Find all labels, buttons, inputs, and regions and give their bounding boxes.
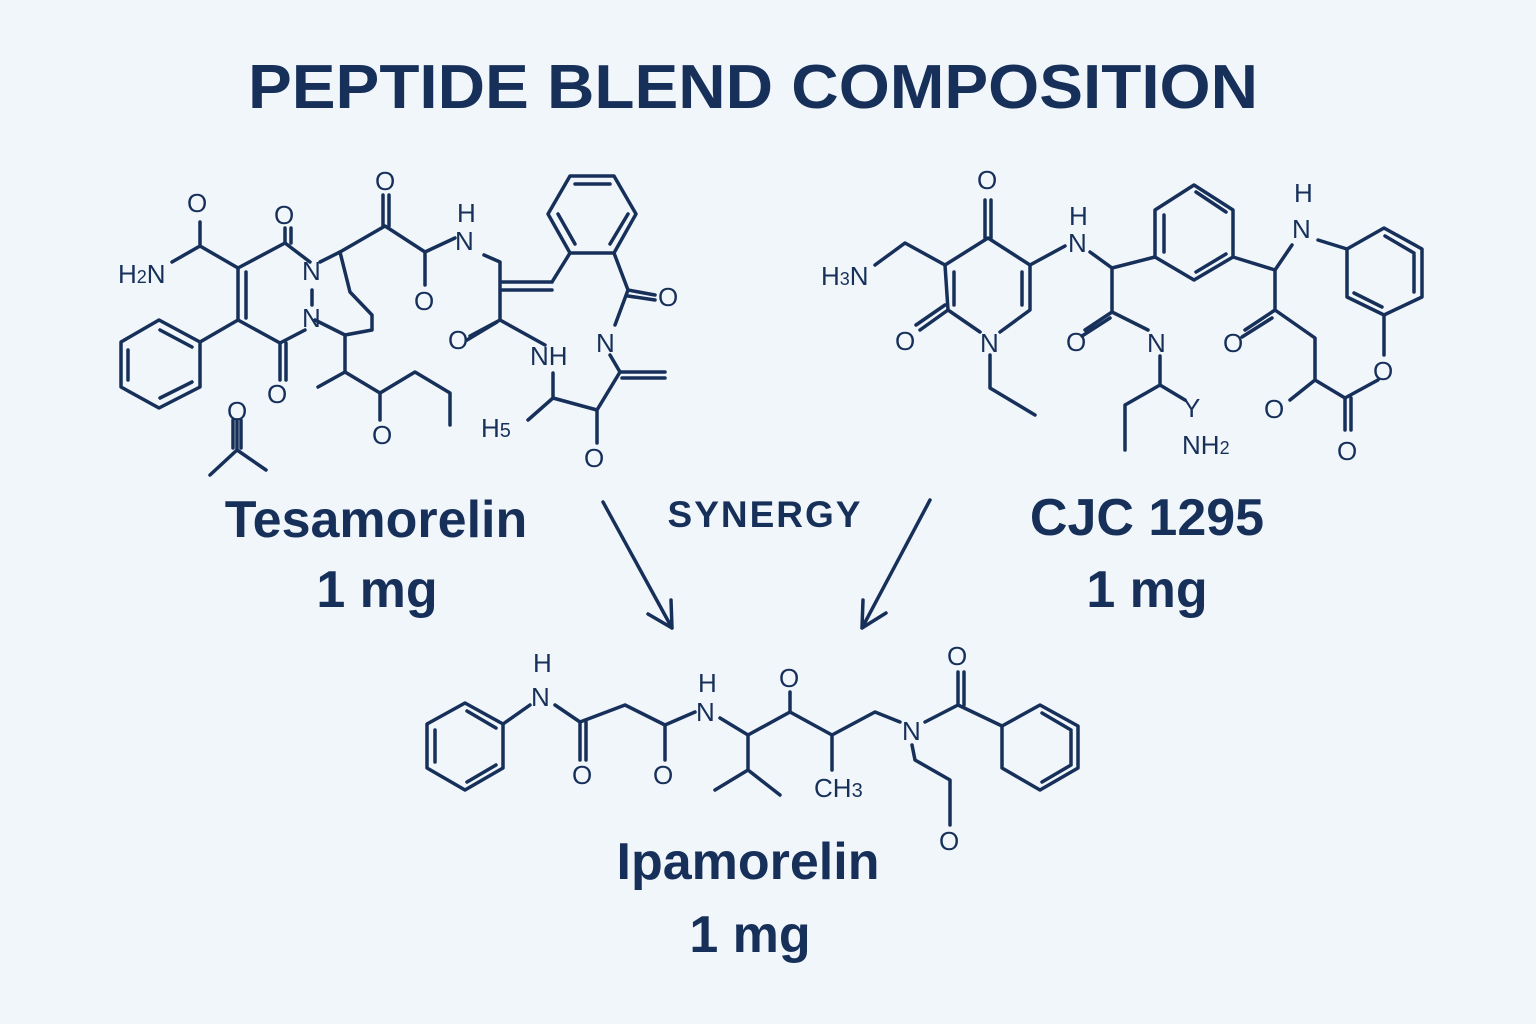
tesamorelin atom labels: [118, 166, 678, 473]
tesamorelin atom labels: N: [302, 303, 321, 333]
tesamorelin atom labels: O: [448, 325, 468, 355]
tesamorelin atom labels: O: [372, 420, 392, 450]
tesamorelin atom labels: H5: [481, 413, 511, 443]
ipamorelin atom labels: O: [947, 641, 967, 671]
arrow: right to ipamorelin: [862, 500, 930, 628]
ipamorelin atom labels: H: [533, 648, 552, 678]
cjc atom labels: NH2: [1182, 430, 1230, 460]
ipamorelin atom labels: O: [653, 760, 673, 790]
tesamorelin atom labels: N: [596, 328, 615, 358]
heading: ipamorelin: [617, 833, 879, 964]
tesamorelin atom labels: H2N: [118, 259, 166, 289]
cjc atom labels: N: [1068, 228, 1087, 258]
heading: tesamorelin: [225, 491, 527, 619]
heading: ipamorelin: 1 mg: [689, 906, 811, 964]
tesamorelin atom labels: O: [414, 286, 434, 316]
ipamorelin atom labels: CH3: [814, 773, 863, 803]
heading: cjc 1295: 1 mg: [1086, 561, 1208, 619]
ipamorelin atom labels: O: [779, 663, 799, 693]
cjc atom labels: O: [1337, 436, 1357, 466]
cjc atom labels: N: [1147, 328, 1166, 358]
cjc atom labels: O: [1223, 328, 1243, 358]
molecule: ipamorelin structure: [427, 672, 1078, 825]
ipamorelin atom labels: O: [939, 826, 959, 856]
cjc atom labels: O: [977, 165, 997, 195]
tesamorelin atom labels: H: [457, 198, 476, 228]
molecule: tesamorelin structure: [121, 176, 665, 475]
tesamorelin atom labels: NH: [530, 341, 568, 371]
cjc atom labels: O: [895, 326, 915, 356]
heading: cjc 1295: CJC 1295: [1030, 489, 1264, 547]
tesamorelin atom labels: O: [375, 166, 395, 196]
heading: tesamorelin: 1 mg: [316, 561, 438, 619]
tesamorelin atom labels: N: [302, 256, 321, 286]
heading: tesamorelin: Tesamorelin: [225, 491, 527, 549]
cjc atom labels: H: [1069, 201, 1088, 231]
molecule: cjc 1295 structure: [875, 185, 1422, 450]
tesamorelin atom labels: O: [584, 443, 604, 473]
ipamorelin atom labels: N: [696, 697, 715, 727]
ipamorelin atom labels: H: [698, 668, 717, 698]
cjc atom labels: O: [1373, 356, 1393, 386]
ipamorelin atom labels: [531, 641, 967, 856]
tesamorelin atom labels: O: [267, 379, 287, 409]
cjc atom labels: [821, 165, 1393, 466]
cjc atom labels: N: [980, 328, 999, 358]
cjc atom labels: O: [1066, 327, 1086, 357]
cjc atom labels: H3N: [821, 261, 869, 291]
ipamorelin atom labels: N: [531, 682, 550, 712]
tesamorelin atom labels: O: [274, 200, 294, 230]
tesamorelin atom labels: O: [187, 188, 207, 218]
heading: ipamorelin: Ipamorelin: [617, 833, 879, 891]
arrow: left to ipamorelin: [603, 502, 672, 628]
synergy label: SYNERGY: [668, 494, 862, 535]
heading: cjc 1295: [1030, 489, 1264, 619]
ipamorelin atom labels: O: [572, 760, 592, 790]
ipamorelin atom labels: N: [902, 716, 921, 746]
cjc atom labels: N: [1292, 214, 1311, 244]
cjc atom labels: H: [1294, 178, 1313, 208]
tesamorelin atom labels: O: [227, 396, 247, 426]
cjc atom labels: O: [1264, 394, 1284, 424]
tesamorelin atom labels: O: [658, 282, 678, 312]
title: PEPTIDE BLEND COMPOSITION: [248, 53, 1258, 122]
cjc atom labels: Y: [1183, 393, 1200, 423]
tesamorelin atom labels: N: [455, 226, 474, 256]
